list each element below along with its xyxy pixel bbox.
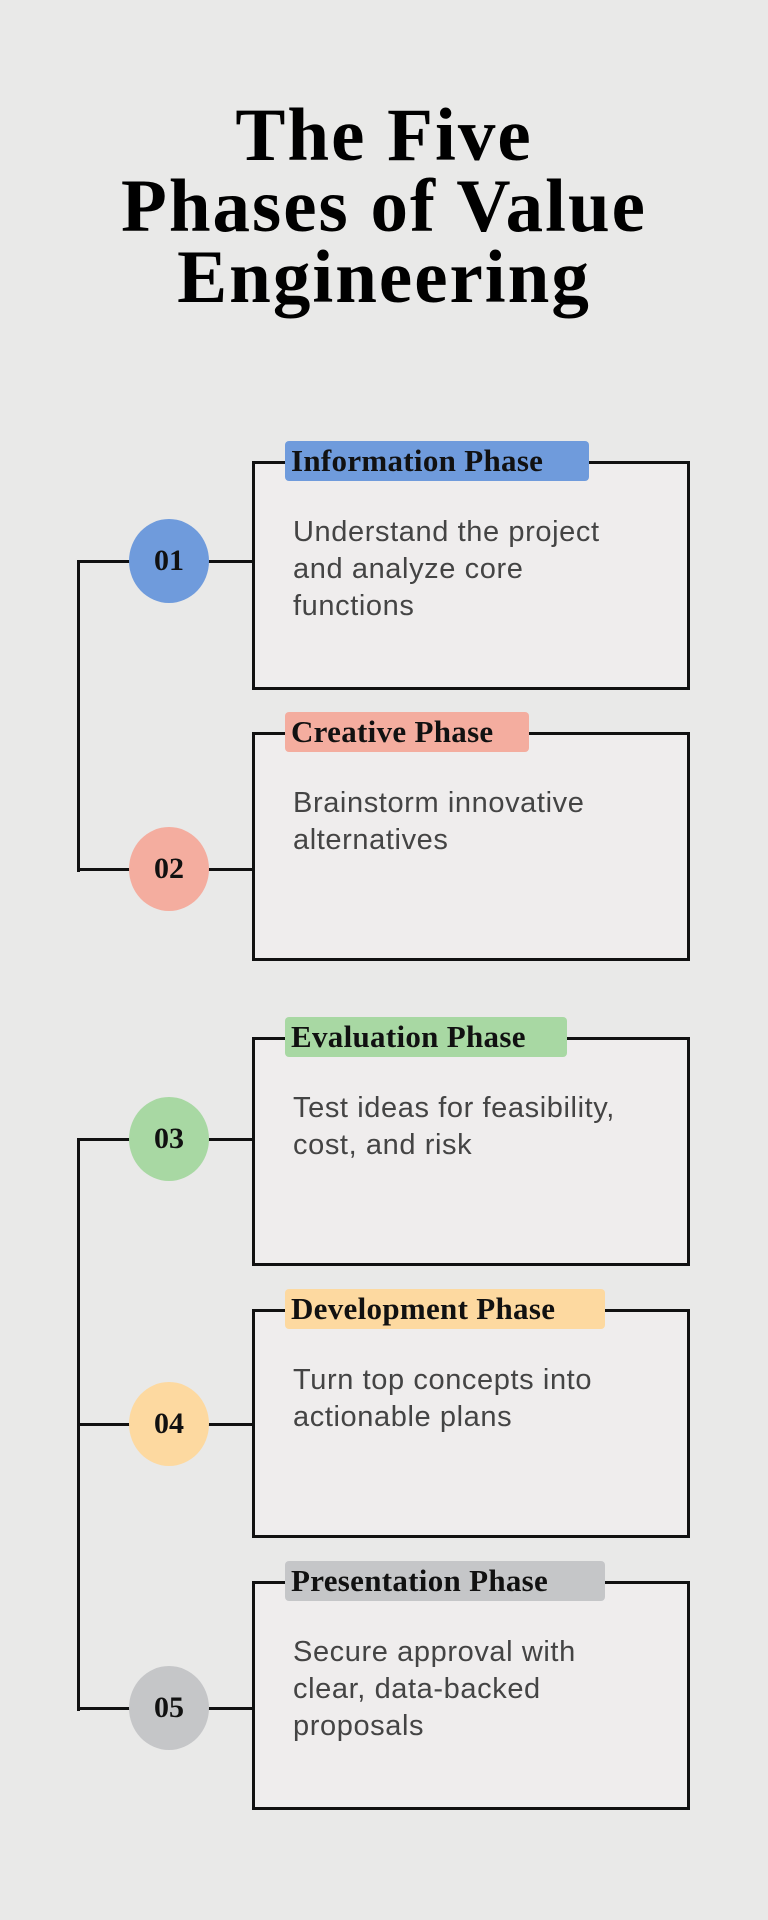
title: Engineering [177, 236, 591, 319]
text: creative [293, 787, 584, 856]
text: development: actionable plans [293, 1401, 512, 1433]
panel: presentation [252, 1581, 690, 1810]
text: information: and analyze core [293, 553, 523, 585]
text: creative: Brainstorm innovative [293, 787, 584, 819]
connector: group 1 [77, 560, 252, 872]
panel: information [252, 461, 690, 690]
label: evaluation phase: Evaluation Phase [291, 1019, 526, 1054]
circle 01: 01 [154, 544, 184, 577]
circle 03 [129, 1097, 209, 1181]
panel: creative [252, 732, 690, 961]
text: presentation [293, 1636, 576, 1742]
circle 02: 02 [154, 852, 184, 885]
circle 01 [129, 519, 209, 603]
title: The Five [235, 94, 533, 177]
text: evaluation [293, 1092, 615, 1161]
label: development phase: Development Phase [291, 1291, 555, 1326]
connector: group 2 [77, 1138, 252, 1711]
panel: evaluation [252, 1037, 690, 1266]
circle 02 [129, 827, 209, 911]
label: creative phase: Creative Phase [291, 714, 494, 749]
text: presentation: clear, data-backed [293, 1673, 541, 1705]
title [121, 94, 647, 319]
text: creative: alternatives [293, 824, 448, 856]
text: information: Understand the project [293, 516, 600, 548]
circle 05 [129, 1666, 209, 1750]
text: evaluation: cost, and risk [293, 1129, 472, 1161]
text: development: Turn top concepts into [293, 1364, 592, 1396]
circle 04 [129, 1382, 209, 1466]
title: Phases of Value [121, 165, 647, 248]
label: presentation phase: Presentation Phase [291, 1563, 548, 1598]
text: presentation: Secure approval with [293, 1636, 576, 1668]
text: development [293, 1364, 592, 1433]
circle 04: 04 [154, 1407, 184, 1440]
circle 03: 03 [154, 1122, 184, 1155]
circle 05: 05 [154, 1691, 184, 1724]
text: evaluation: Test ideas for feasibility, [293, 1092, 615, 1124]
label: information phase: Information Phase [291, 443, 543, 478]
text: information [293, 516, 600, 622]
text: information: functions [293, 590, 414, 622]
text: presentation: proposals [293, 1710, 424, 1742]
panel: development [252, 1309, 690, 1538]
